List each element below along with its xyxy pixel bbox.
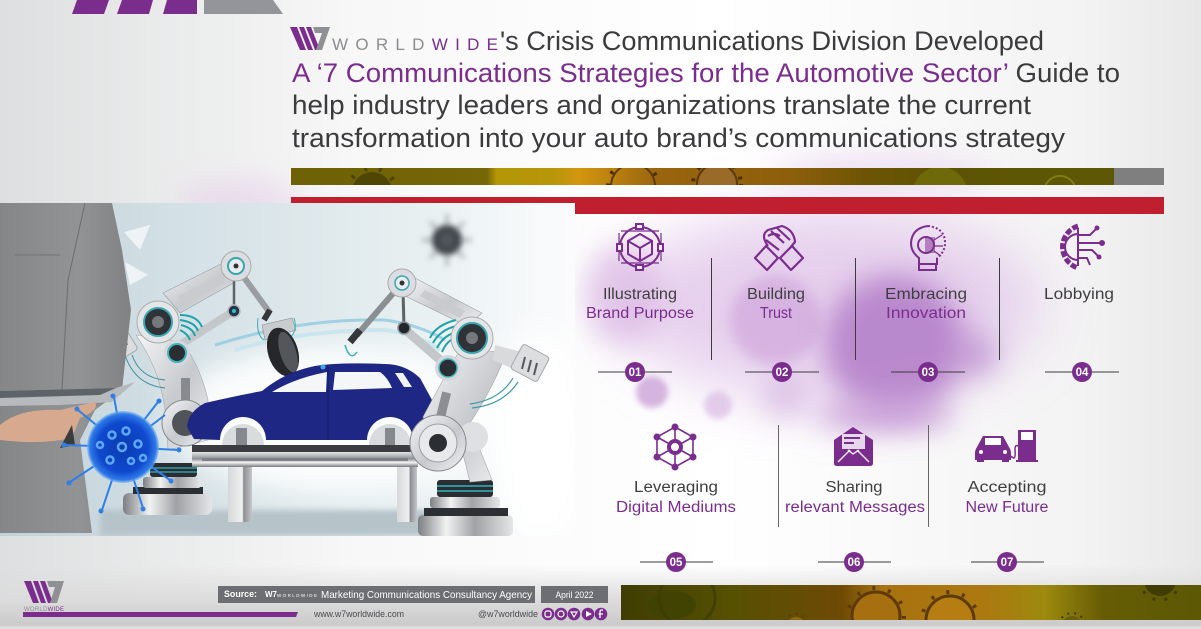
- icon: W7 logo: [290, 27, 330, 50]
- strategy 01: [586, 224, 694, 322]
- label: Illustrating: [603, 286, 677, 303]
- date box: [541, 586, 608, 603]
- title line 2: A ‘7 Communications Strategies for the Automotive Sector’ Guide to: [292, 58, 1120, 88]
- top logo fragment: [72, 0, 283, 14]
- assembly table: [192, 445, 418, 522]
- number badges: 02: [776, 367, 788, 379]
- label: Embracing: [885, 286, 967, 303]
- strategy 07: New Future: [966, 499, 1048, 516]
- icon: electric car charger: [975, 430, 1038, 462]
- icon: envelope: [834, 427, 873, 466]
- title line 3: help industry leaders and organizations translate the current: [292, 90, 1032, 120]
- social icons: [542, 608, 607, 620]
- strategy 02: [747, 226, 805, 322]
- number badges: [625, 362, 1092, 572]
- number badges: 05: [670, 557, 683, 569]
- robot arm: right: [345, 269, 550, 536]
- number badges: 03: [922, 367, 934, 379]
- icon: dark blurred virus: [422, 214, 472, 266]
- footer logo: [24, 581, 64, 613]
- strategy 04: [1044, 226, 1114, 303]
- strategy 05: [616, 424, 736, 516]
- source bar: Source:: [224, 589, 257, 599]
- strategy 03: [885, 226, 967, 322]
- title block: [290, 26, 1120, 153]
- strategy 02: Trust: [760, 305, 793, 322]
- website: www.w7worldwide.com: [313, 609, 404, 619]
- strategy 03: Innovation: [886, 305, 966, 322]
- date box: April 2022: [556, 590, 594, 601]
- strategy 01: Brand Purpose: [586, 305, 694, 322]
- icon: blue virus: [62, 394, 182, 514]
- number badges: 01: [629, 367, 642, 379]
- icon: cube: [617, 224, 663, 270]
- title line 4: transformation into your auto brand’s communications strategy: [292, 123, 1066, 153]
- businessman with tablet: [0, 203, 135, 533]
- strategy 07: [966, 430, 1048, 516]
- wordmark: WORLD WIDE: [332, 35, 498, 54]
- source bar: [218, 586, 535, 603]
- decorative pie glyph: [124, 225, 150, 285]
- number badges: 06: [848, 557, 860, 569]
- footer olive banner: [621, 585, 1201, 620]
- olive banner: [291, 168, 1164, 185]
- label: Sharing: [826, 479, 882, 496]
- strategy 05: Digital Mediums: [616, 499, 736, 516]
- number badges: 04: [1076, 367, 1089, 379]
- label: Accepting: [968, 479, 1046, 496]
- icon: lightbulb: [911, 226, 945, 270]
- hero illustration: [0, 203, 590, 550]
- strategy 06: [785, 427, 925, 516]
- footer logo: WORLDWIDE: [24, 607, 64, 613]
- strategy 06: relevant Messages: [785, 499, 925, 516]
- number badges: 07: [1001, 557, 1013, 569]
- purple glow background: [180, 156, 1040, 433]
- social handle: @w7worldwide: [478, 609, 538, 619]
- icon: network: [654, 424, 696, 470]
- label: Lobbying: [1044, 286, 1114, 303]
- label: Leveraging: [634, 479, 718, 496]
- label: Building: [747, 286, 805, 303]
- icon: handshake: [755, 226, 803, 270]
- icon: gear circuit: [1063, 226, 1104, 268]
- car body: [187, 363, 432, 445]
- red banner: [291, 197, 1164, 214]
- source bar: Marketing Communications Consultancy Agency: [321, 589, 533, 601]
- source bar: W7: [265, 590, 278, 599]
- robot arm: left: [98, 251, 305, 515]
- background glow and floor: [170, 345, 510, 495]
- footer purple bar: [23, 612, 298, 617]
- blueprint car outline: [215, 320, 445, 345]
- title line 1: 's Crisis Communications Division Developed: [500, 26, 1044, 56]
- source bar: WORLDWIDE: [277, 593, 317, 598]
